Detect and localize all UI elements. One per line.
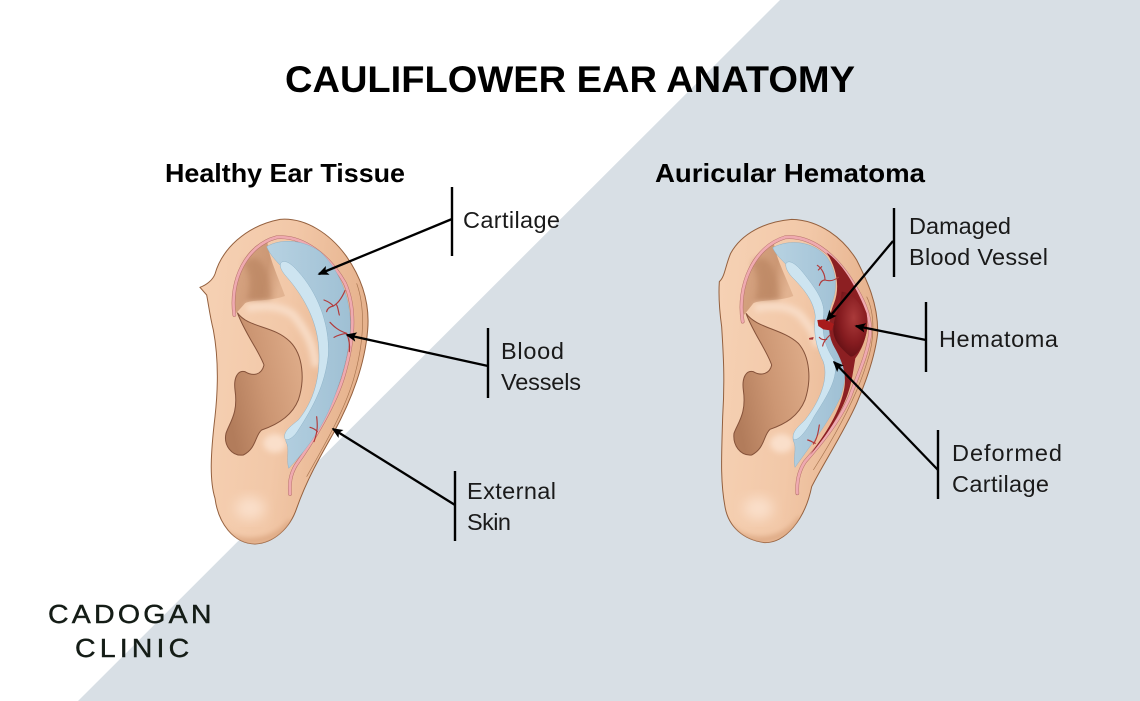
label: cartilage: [319, 187, 560, 274]
pink membrane: [233, 237, 352, 494]
concha: [734, 313, 809, 455]
upper fossa: [742, 244, 793, 315]
antihelix light band: [247, 306, 316, 367]
label: external skin: Skin: [467, 509, 511, 535]
logo: Cadogan Clinic: [48, 599, 212, 663]
logo: Cadogan Clinic: CADOGAN: [48, 599, 212, 629]
title: CAULIFLOWER EAR ANATOMY: [285, 59, 855, 100]
heading: auricular hematoma: Auricular Hematoma: [655, 158, 926, 188]
label: blood vessels: Vessels: [501, 369, 581, 395]
heading: healthy ear tissue: Healthy Ear Tissue: [165, 158, 405, 188]
label: external skin: [333, 429, 556, 541]
illustration: healthy ear: [200, 219, 368, 544]
label: damaged blood vessel: Damaged: [909, 213, 1011, 239]
label: cartilage: Cartilage: [463, 207, 560, 233]
cartilage: [773, 242, 845, 467]
hematoma: [810, 253, 867, 455]
label: external skin: External: [467, 478, 556, 504]
label: deformed cartilage: [834, 362, 1062, 499]
panel: healthy ear tissue: [165, 158, 581, 544]
illustration: ear with hematoma: [719, 219, 878, 543]
label: hematoma: [856, 302, 1059, 372]
label: damaged blood vessel: Blood Vessel: [909, 244, 1048, 270]
blood vessels: [324, 291, 345, 315]
cartilage: [267, 241, 350, 468]
pink membrane: [741, 237, 870, 493]
concha: [226, 313, 302, 455]
panel: auricular hematoma: [655, 158, 1062, 543]
label: hematoma: Hematoma: [939, 326, 1059, 352]
label: blood vessels: [347, 328, 581, 398]
antihelix light band: [755, 306, 817, 347]
label: damaged blood vessel: [827, 208, 1048, 320]
label: blood vessels: Blood: [501, 338, 564, 364]
upper fossa: [234, 241, 285, 313]
label: deformed cartilage: Deformed: [952, 440, 1062, 466]
logo: Cadogan Clinic: CLINIC: [75, 633, 189, 663]
damaged blood vessels: [817, 265, 838, 285]
label: deformed cartilage: Cartilage: [952, 471, 1049, 497]
